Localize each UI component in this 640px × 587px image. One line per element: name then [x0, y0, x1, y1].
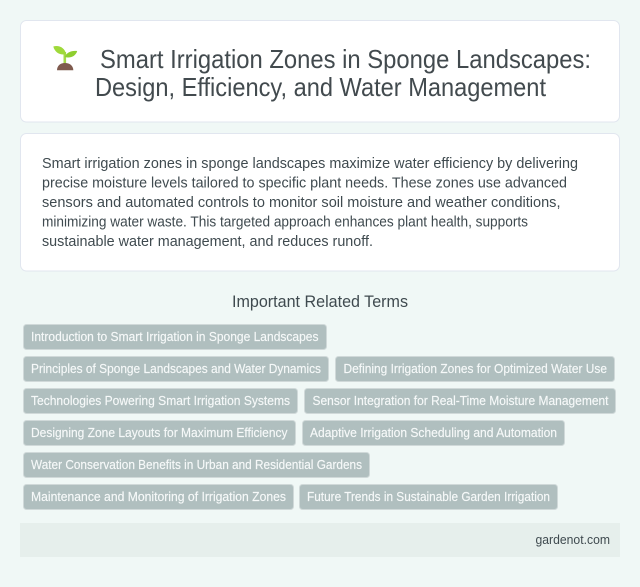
tag — [336, 356, 614, 382]
title — [95, 44, 591, 102]
title: Design, Efficiency, and Water Management — [95, 72, 547, 102]
footer — [20, 523, 620, 557]
summary text: Smart irrigation zones in sponge landscapes maximize water efficiency by delivering — [42, 155, 578, 172]
tag — [24, 484, 294, 510]
tag: Technologies Powering Smart Irrigation Systems — [31, 394, 290, 408]
summary text: precise moisture levels tailored to specific plant needs. These zones use advanced — [42, 174, 567, 192]
summary text: minimizing water waste. This targeted approach enhances plant health, supports — [42, 214, 528, 230]
tag — [302, 420, 564, 446]
tag list — [24, 324, 616, 510]
footer credit: gardenot.com — [536, 532, 610, 547]
summary text — [42, 155, 578, 250]
tag: Sensor Integration for Real-Time Moisture Management — [312, 394, 609, 408]
tag: Introduction to Smart Irrigation in Sponge Landscapes — [31, 330, 318, 344]
tag: Adaptive Irrigation Scheduling and Automation — [310, 426, 557, 440]
tag: Maintenance and Monitoring of Irrigation Zones — [31, 490, 286, 504]
tag: Designing Zone Layouts for Maximum Efficiency — [31, 426, 288, 440]
icon: seedling — [53, 46, 77, 70]
panel: title card — [20, 20, 620, 122]
tag: Water Conservation Benefits in Urban and Residential Gardens — [31, 458, 362, 472]
tag — [24, 324, 326, 350]
heading: related terms: Important Related Terms — [232, 293, 408, 311]
tag — [24, 452, 370, 478]
tag — [24, 356, 328, 382]
tag — [24, 388, 298, 414]
tag: Defining Irrigation Zones for Optimized Water Use — [344, 362, 607, 376]
title: Smart Irrigation Zones in Sponge Landscapes: — [100, 44, 591, 74]
summary text: sustainable water management, and reduces runoff. — [42, 233, 373, 250]
tag — [300, 484, 558, 510]
tag — [304, 388, 616, 414]
tag: Future Trends in Sustainable Garden Irrigation — [307, 490, 550, 504]
summary text: sensors and automated controls to monitor soil moisture and weather conditions, — [42, 194, 560, 211]
tag — [24, 420, 296, 446]
panel: summary — [20, 134, 620, 271]
tag: Principles of Sponge Landscapes and Water Dynamics — [31, 362, 321, 376]
